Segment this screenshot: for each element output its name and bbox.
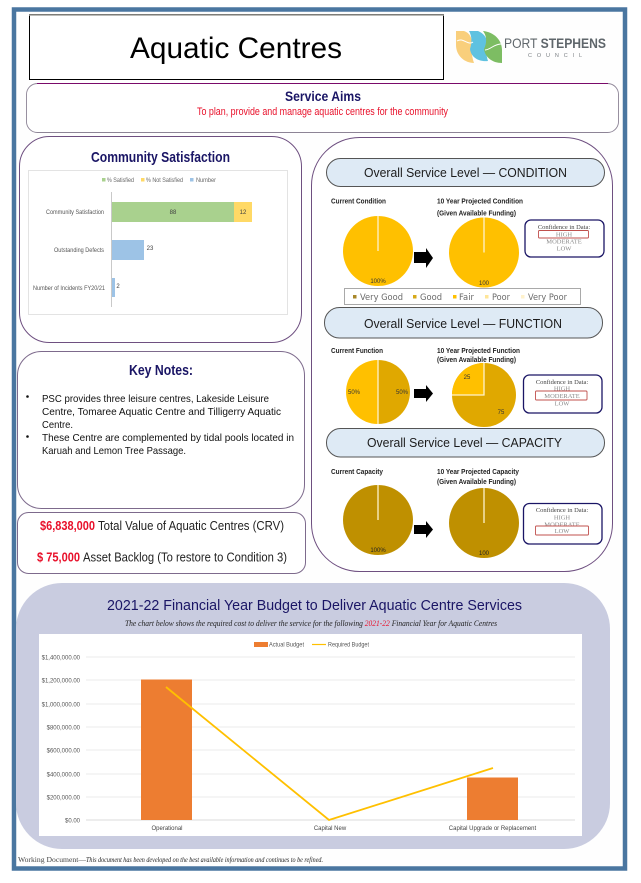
heading: function: Overall Service Level — FUNCTION	[364, 316, 562, 331]
pie chart: current function	[346, 360, 410, 424]
text: function chart labels: (Given Available Funding)	[437, 355, 516, 364]
text: capacity chart labels	[331, 467, 520, 486]
pie chart: current capacity: 100%	[370, 548, 386, 554]
text: total value: $6,838,000	[40, 518, 95, 533]
pie chart: projected condition	[449, 218, 519, 288]
text: service aims description: To plan, provide and manage aquatic centres for the community	[197, 106, 448, 118]
text: capacity chart labels: 10 Year Projected Capacity	[437, 467, 520, 476]
callout: condition confidence in data: MODERATE	[546, 238, 582, 246]
legend: budget: Required Budget	[328, 642, 369, 648]
legend: condition ratings: Fair	[459, 293, 474, 303]
pie chart: projected function	[452, 363, 516, 427]
callout: capacity confidence in data: MODERATE	[544, 522, 580, 528]
chart: actual vs required budget: $1,400,000.00	[42, 656, 81, 662]
panel: asset values	[18, 512, 306, 574]
heading: condition	[326, 158, 604, 186]
panel: budget	[16, 583, 610, 849]
text: condition chart labels	[331, 196, 523, 218]
legend: budget	[254, 642, 369, 648]
panel: service aims	[26, 84, 618, 132]
chart: actual vs required budget: $1,000,000.00	[42, 702, 81, 708]
text: function chart labels	[331, 346, 520, 364]
heading: service aims: Service Aims	[285, 88, 361, 104]
arrow: function	[414, 385, 433, 402]
pie chart: current function: 50%	[396, 390, 409, 396]
callout: condition confidence in data	[525, 220, 604, 257]
panel: community satisfaction	[20, 136, 302, 342]
heading: budget: 2021-22 Financial Year Budget to Deliver Aquatic Centre Services	[107, 598, 522, 614]
section: function	[324, 308, 602, 427]
text: total value	[40, 518, 284, 533]
text: key notes bullets	[26, 393, 294, 457]
bar chart: community satisfaction: Number of Incidents FY20/21	[33, 286, 106, 292]
heading: condition: Overall Service Level — CONDITION	[364, 165, 567, 180]
heading: function	[324, 308, 602, 338]
pie chart: projected function: 75	[498, 410, 505, 416]
bar chart: community satisfaction: 12	[240, 210, 247, 216]
heading: key notes: Key Notes:	[129, 362, 193, 379]
chart: actual vs required budget: $0.00	[65, 818, 81, 824]
arrow: capacity	[414, 521, 433, 538]
callout: function confidence in data: Confidence in Data:	[536, 379, 588, 386]
callout: function confidence in data: MODERATE	[544, 393, 580, 400]
text: key notes bullets: Centre.	[42, 419, 73, 431]
text: total value: Total Value of Aquatic Centres (CRV)	[98, 518, 284, 533]
chart: actual vs required budget: $800,000.00	[47, 726, 81, 732]
callout: function confidence in data: HIGH	[554, 386, 570, 392]
pie chart: current function: 50%	[348, 390, 361, 396]
callout: function confidence in data	[524, 375, 602, 413]
chart: actual vs required budget: Operational	[151, 826, 183, 832]
callout: capacity confidence in data	[524, 504, 602, 544]
icon: Port Stephens Council logo: COUNCIL	[528, 53, 582, 59]
section: capacity	[326, 428, 604, 558]
text: condition chart labels: Current Condition	[331, 196, 386, 206]
footer note: This document has been developed on the best available information and continues to be refined.	[86, 855, 323, 864]
text: function chart labels: 10 Year Projected Function	[437, 346, 520, 355]
text: key notes bullets: These Centre are complemented by tidal pools located in	[42, 432, 294, 444]
chart: actual vs required budget: $1,200,000.00	[42, 678, 81, 684]
title: Aquatic Centres	[130, 32, 342, 65]
chart: actual vs required budget: $200,000.00	[47, 796, 81, 802]
bar chart: community satisfaction	[28, 170, 288, 314]
text: asset backlog: $ 75,000	[37, 550, 80, 564]
heading: community satisfaction: Community Satisfaction	[91, 149, 230, 166]
legend: condition ratings: Good	[420, 293, 442, 303]
panel: key notes	[18, 352, 304, 508]
title	[29, 14, 444, 80]
chart: actual vs required budget: Capital New	[314, 826, 347, 832]
pie chart: current condition: 100%	[370, 279, 386, 285]
pie chart: projected capacity	[449, 488, 519, 558]
bar chart: community satisfaction: 2	[116, 284, 120, 290]
bar chart: community satisfaction: Outstanding Defects	[54, 248, 104, 254]
bar chart: community satisfaction: % Satisfied	[107, 178, 134, 184]
legend: condition ratings: Poor	[492, 293, 510, 303]
callout: capacity confidence in data: Confidence in Data:	[536, 507, 588, 514]
text: asset backlog: Asset Backlog (To restore to Condition 3)	[83, 550, 287, 564]
heading: capacity: Overall Service Level — CAPACITY	[367, 435, 562, 450]
text: capacity chart labels: (Given Available Funding)	[437, 477, 516, 486]
text: function chart labels: Current Function	[331, 346, 383, 355]
icon: Port Stephens Council logo	[456, 31, 606, 63]
text: capacity chart labels: Current Capacity	[331, 467, 384, 476]
chart: actual vs required budget: $600,000.00	[47, 748, 81, 754]
legend: condition ratings: Very Good	[360, 293, 403, 303]
bar chart: community satisfaction: 23	[147, 246, 154, 252]
bar chart: community satisfaction: % Not Satisfied	[146, 178, 183, 184]
footer note	[18, 855, 323, 864]
text: key notes bullets: Centre, Tomaree Aquatic Centre and Tilligerry Aquatic	[42, 406, 281, 418]
text: key notes bullets: Karuah and Lemon Tree Passage.	[42, 445, 186, 457]
text: budget description: The chart below shows the required cost to deliver the service for the following 2021-22 Financial Year for Aquatic Centres	[125, 619, 497, 628]
bar chart: community satisfaction: 88	[170, 210, 177, 216]
legend: budget: Actual Budget	[269, 642, 304, 648]
chart: actual vs required budget: Capital Upgrade or Replacement	[449, 826, 537, 832]
pie chart: current capacity	[343, 485, 413, 555]
callout: capacity confidence in data: HIGH	[554, 514, 570, 522]
bar chart: community satisfaction: Community Satisfaction	[46, 210, 104, 216]
chart: actual vs required budget: $400,000.00	[47, 772, 81, 778]
section: condition	[326, 158, 604, 304]
arrow: condition	[414, 248, 433, 268]
text: condition chart labels: (Given Available Funding)	[437, 208, 516, 218]
panel: overall service levels	[312, 138, 612, 572]
legend: condition ratings: Very Poor	[528, 293, 567, 303]
callout: condition confidence in data: Confidence in Data:	[538, 224, 590, 231]
legend: condition ratings	[344, 288, 580, 304]
pie chart: projected condition: 100	[479, 281, 490, 287]
callout: condition confidence in data: HIGH	[556, 232, 572, 238]
chart: actual vs required budget	[39, 634, 582, 836]
bar chart: community satisfaction: Number	[196, 178, 216, 184]
pie chart: projected function: 25	[464, 375, 471, 381]
icon: Port Stephens Council logo: PORT STEPHENS	[504, 35, 606, 51]
text: key notes bullets: PSC provides three leisure centres, Lakeside Leisure	[42, 393, 269, 405]
footer note: Working Document—	[18, 855, 86, 864]
heading: capacity	[326, 428, 604, 457]
pie chart: current condition	[343, 216, 413, 286]
pie chart: projected capacity: 100	[479, 551, 490, 557]
callout: function confidence in data: LOW	[555, 400, 570, 408]
text: condition chart labels: 10 Year Projected Condition	[437, 196, 523, 206]
callout: capacity confidence in data: LOW	[555, 528, 570, 535]
callout: condition confidence in data: LOW	[557, 246, 572, 252]
